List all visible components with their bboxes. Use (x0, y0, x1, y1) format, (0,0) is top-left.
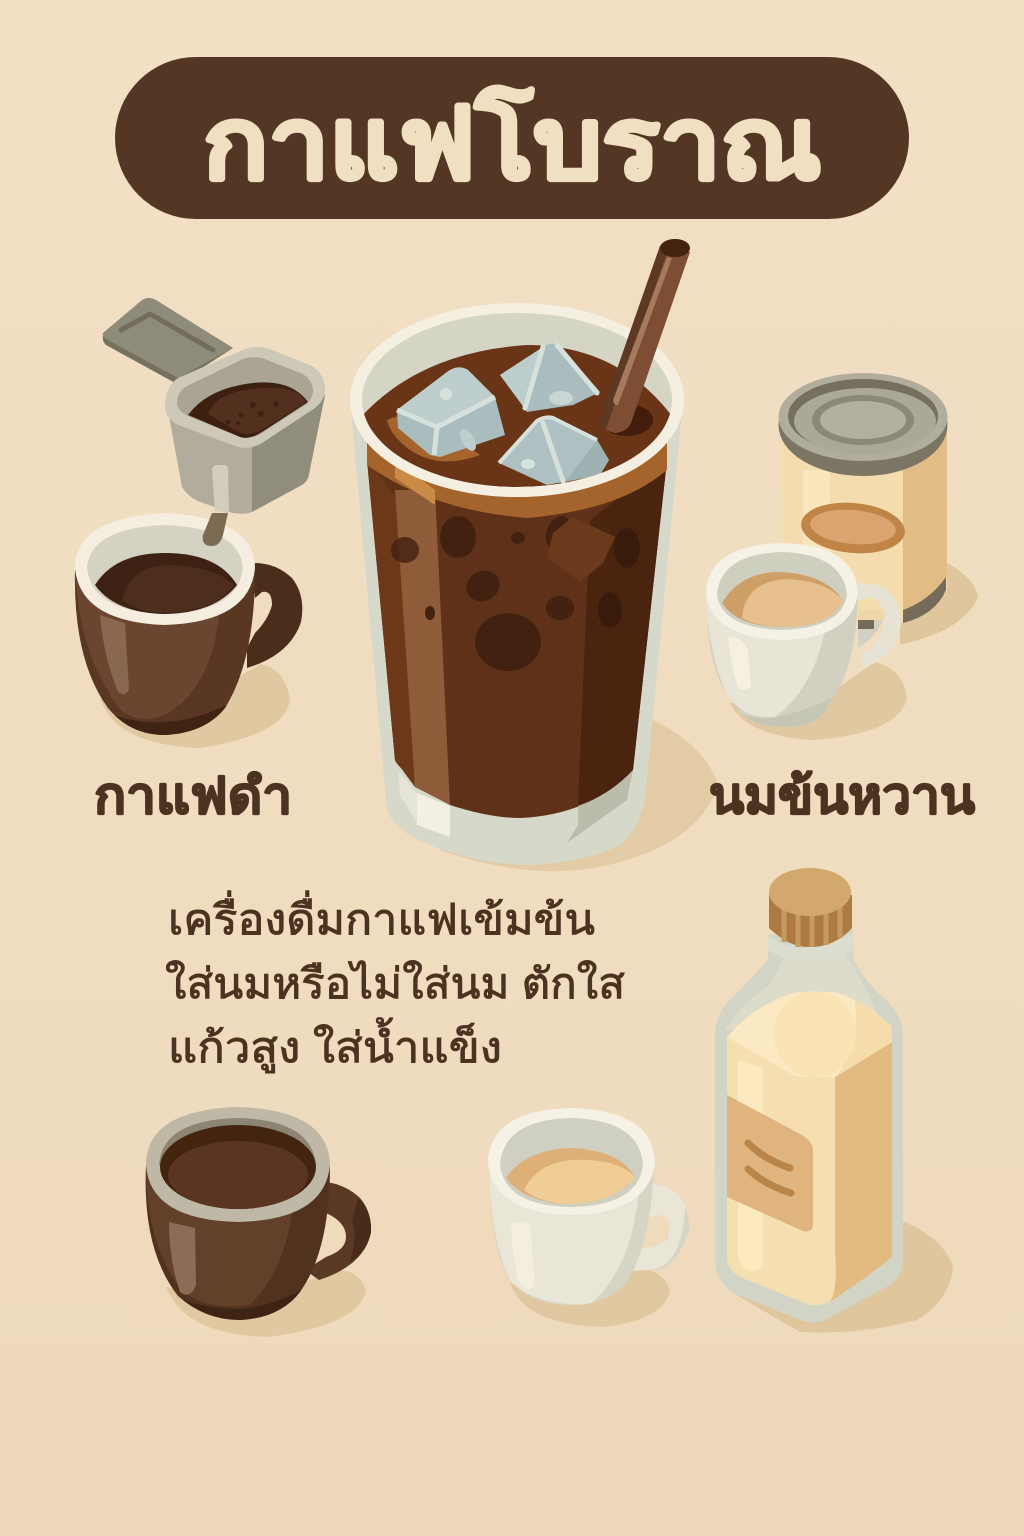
title banner (115, 57, 909, 219)
icon: condensed milk can (778, 373, 978, 645)
icon: lower black coffee cup (140, 1107, 371, 1337)
label: sweetened condensed milk: นมข้นหวาน (709, 768, 975, 824)
straw (600, 239, 690, 433)
description text: เครื่องดื่มกาแฟเข้มข้น (168, 891, 595, 943)
icon: lower milk cup (485, 1108, 689, 1327)
icon: milk bottle (715, 868, 953, 1332)
description text (165, 891, 625, 1073)
description text: แก้วสูง ใส่น้ำแข็ง (168, 1017, 502, 1073)
icon: iced coffee glass (350, 239, 718, 871)
icon: black coffee cup (70, 513, 302, 748)
title text: กาแฟโบราณ (203, 85, 821, 200)
icon: milk cup (700, 543, 907, 740)
icon: coffee drip from scoop (203, 513, 228, 546)
icon: coffee scoop (103, 298, 325, 514)
label: black coffee: กาแฟดำ (94, 768, 292, 824)
ice cubes (397, 344, 609, 485)
description text: ใส่นมหรือไม่ใส่นม ตักใส (165, 960, 625, 1007)
